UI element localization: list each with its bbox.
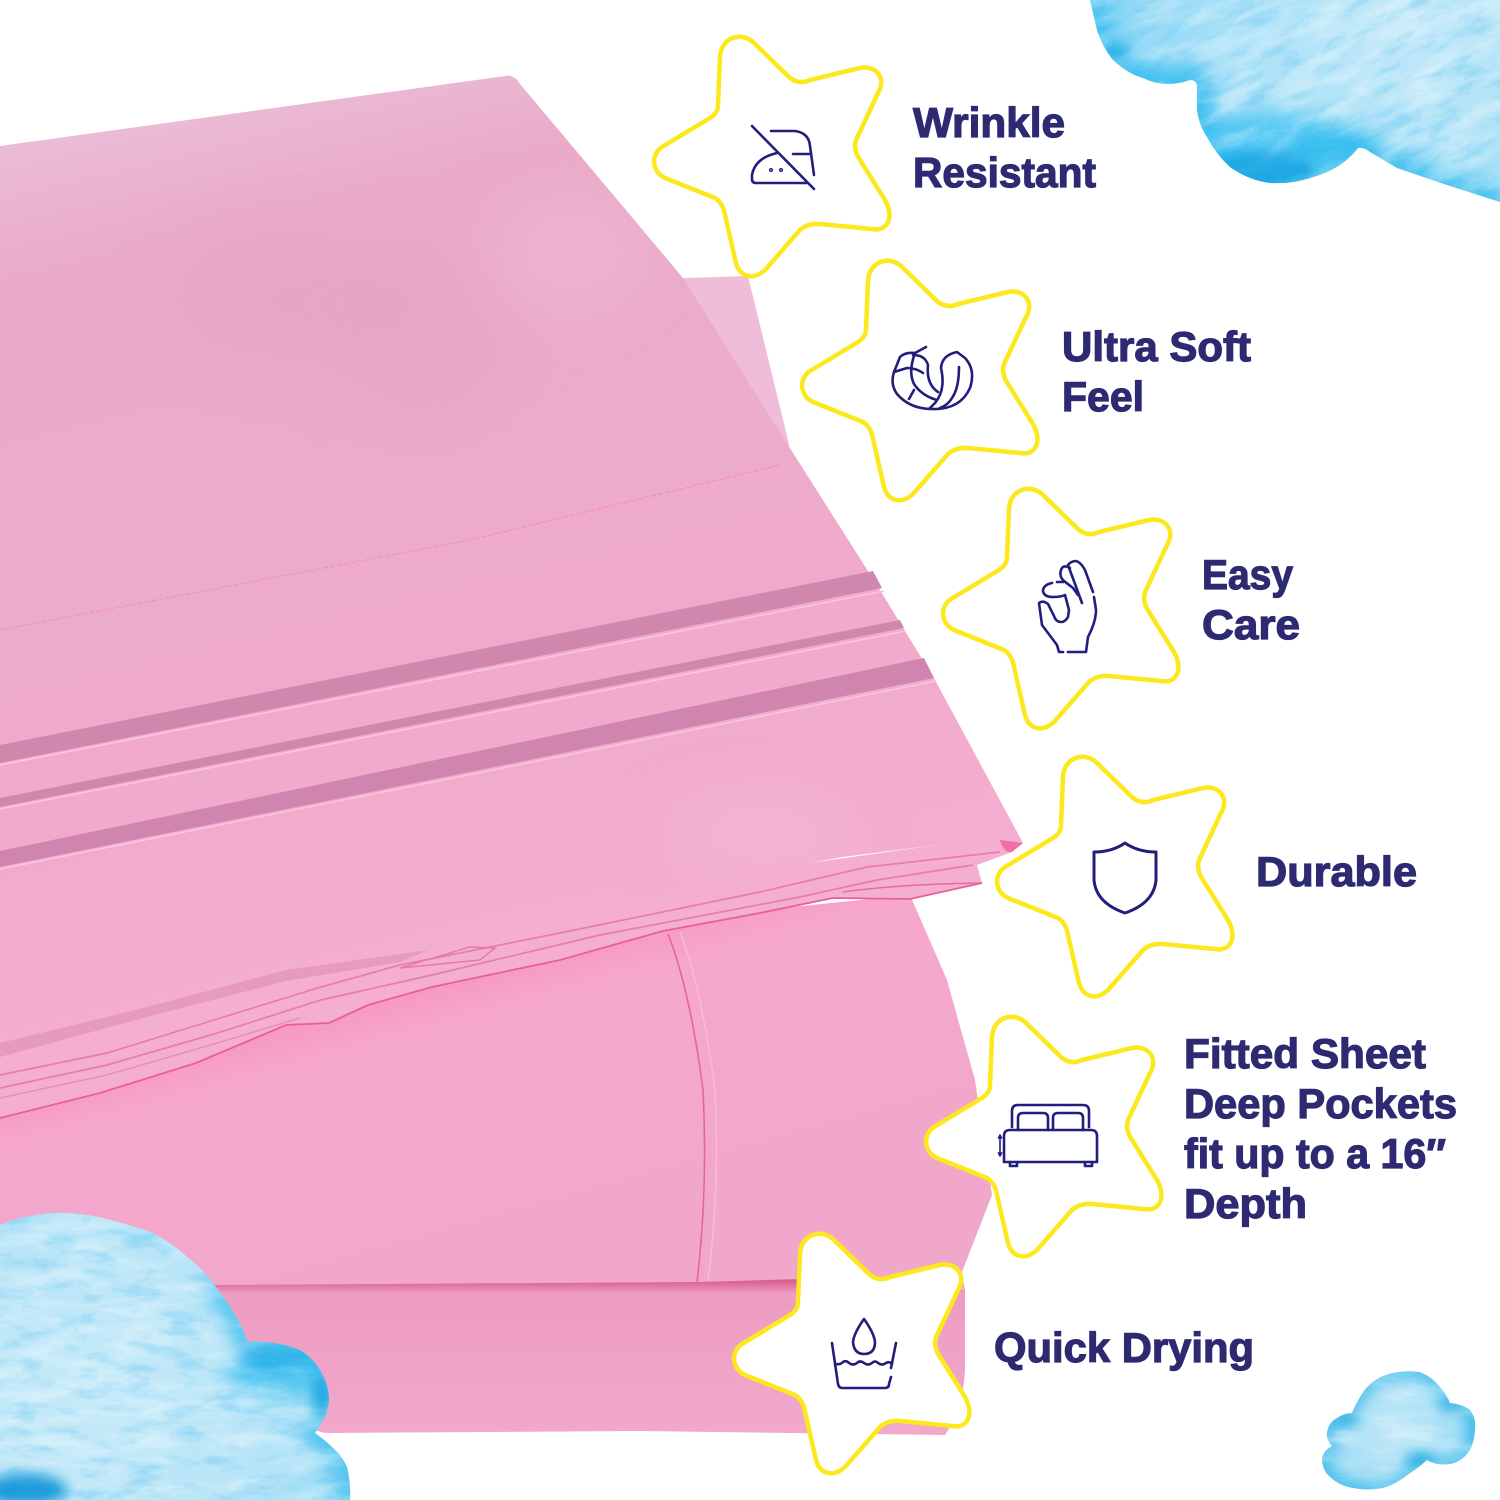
pink bed sheet set [0,76,1023,1435]
text: Deep Pockets [1184,1080,1457,1127]
back sheet layer [683,276,800,520]
stripe 2 [0,620,904,807]
stripe 1 [0,571,882,763]
text: Resistant [913,149,1096,196]
shadow band beneath pillowcase [0,950,428,1057]
main pillowcase [0,76,1023,1043]
star badge [926,1017,1161,1256]
sheet seam [668,934,705,1282]
text: Fitted Sheet [1184,1030,1426,1077]
fold tip [1000,840,1023,852]
text [1184,1030,1457,1227]
pillowcase shading [548,228,602,272]
icon: drop and basin [832,1319,896,1388]
icon: crossed iron [752,126,814,189]
feature: ultra soft feel [802,261,1251,500]
text: Care [1202,601,1300,648]
text [913,99,1096,196]
feature: durable [997,757,1417,996]
pillowcase hem stitch [0,465,780,630]
text: Ultra Soft [1062,323,1251,370]
text: Wrinkle [913,99,1065,146]
text [1202,551,1300,648]
star badge [734,1234,969,1473]
text [1062,323,1251,420]
text: Feel [1062,373,1144,420]
cloud: bottom right [1322,1371,1476,1490]
text: fit up to a 16″ [1184,1130,1446,1177]
fold lines [0,852,1000,1118]
bottom folded sheet [200,1279,965,1435]
text: Durable [1256,848,1417,895]
folded layers under pillowcase [0,836,1023,1118]
icon: bed [998,1105,1097,1166]
star badge [654,37,889,276]
text: Quick Drying [994,1324,1254,1371]
middle folded sheet [0,895,992,1290]
star badge [943,489,1178,728]
cloud: bottom left [0,1200,360,1500]
text: Depth [1184,1180,1307,1227]
stripe 3 [0,658,934,867]
text: Easy [1202,551,1294,598]
icon: feather ball [893,347,972,409]
feature: fitted sheet deep pockets [926,1017,1457,1256]
star badge [997,757,1232,996]
feature: easy care [943,489,1300,728]
cloud: top right [1090,0,1500,202]
feature: quick drying [734,1234,1254,1473]
feature: wrinkle resistant [654,37,1096,276]
icon: ok hand [1039,561,1096,652]
embroidered stripes [0,571,936,869]
star badge [802,261,1037,500]
icon: shield [1094,843,1156,913]
